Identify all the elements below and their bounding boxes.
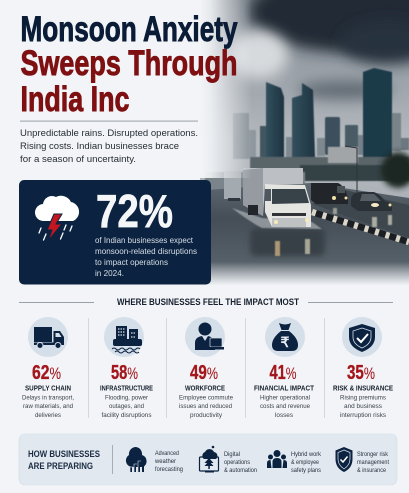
icon: worker at laptop (185, 317, 225, 357)
text: hybrid work (291, 452, 322, 474)
panel: risk and insurance: Rising premiums (340, 394, 387, 402)
text: forecasting: forecasting (155, 467, 183, 473)
panel: 72% statistic (19, 180, 211, 284)
icon: risk shield (336, 447, 352, 472)
text: risk management: Stronger risk (357, 452, 389, 458)
text: forecasting: weather (154, 459, 176, 465)
title: India Inc (20, 80, 130, 119)
hero photo: flooded city road under storm clouds (200, 0, 409, 288)
panel: how businesses are preparing (19, 434, 397, 485)
icon: weather forecasting cloud (126, 447, 147, 472)
icon: digital monitor (200, 446, 218, 472)
panel heading (28, 449, 100, 471)
panel: supply chain: raw materials, and (23, 403, 73, 410)
section heading: WHERE BUSINESSES FEEL THE IMPACT MOST (117, 297, 299, 307)
text: risk management: management (357, 460, 389, 466)
text: digital operations: operations (224, 460, 250, 466)
text: hybrid work: & employee (291, 460, 320, 466)
panel: infrastructure (100, 317, 153, 419)
background truck (224, 171, 241, 201)
car (351, 192, 392, 211)
statistic description: of Indian businesses expect (95, 235, 194, 245)
panel: financial impact: Higher operational (260, 394, 310, 402)
big number: 72% (96, 185, 173, 237)
icon: group of people (267, 450, 287, 468)
panel: financial impact: losses (275, 412, 294, 419)
icon: flooded buildings (104, 317, 144, 357)
title: Monsoon Anxiety (20, 10, 238, 49)
panel: risk and insurance: 35% (347, 362, 375, 384)
panel: supply chain: deliveries (35, 412, 62, 419)
panel: infrastructure: 58% (111, 362, 138, 384)
statistic description: in 2024. (95, 268, 124, 278)
panel: infrastructure: facility disruptions (102, 412, 152, 419)
panel: supply chain: Delays in transport, (22, 394, 74, 402)
title rule (20, 120, 198, 122)
panel: financial impact: FINANCIAL IMPACT (254, 384, 314, 392)
text: digital operations: & automation (224, 468, 257, 474)
text: forecasting (154, 451, 183, 473)
panel: workforce: productivity (190, 412, 223, 419)
intro text: Rising costs. Indian businesses brace (20, 141, 179, 152)
water spray (232, 208, 322, 229)
panel: infrastructure: INFRASTRUCTURE (100, 384, 153, 392)
panel: supply chain: SUPPLY CHAIN (25, 384, 71, 392)
text: digital operations: Digital (224, 452, 240, 458)
main truck (243, 168, 311, 227)
panel: financial impact (254, 317, 314, 419)
panel: infrastructure: outages, and (109, 403, 144, 410)
statistic description: monsoon-related disruptions (95, 246, 197, 256)
text: forecasting: Advanced (155, 451, 179, 457)
truck shadow on water (250, 228, 325, 256)
statistic description: to impact operations (95, 257, 168, 267)
text: risk management (357, 452, 389, 474)
panel: workforce: issues and reduced (179, 403, 232, 410)
text: hybrid work: safety plans (291, 468, 321, 474)
title (20, 10, 238, 119)
panel: supply chain (22, 317, 74, 419)
van (311, 183, 348, 204)
text: digital operations (224, 452, 257, 474)
panel: financial impact: costs and revenue (260, 403, 310, 410)
road barrier (312, 212, 409, 242)
panel: workforce: 49% (190, 362, 218, 384)
text: hybrid work: Hybrid work (291, 452, 322, 458)
panel: workforce (179, 317, 233, 419)
road reflections (275, 208, 392, 256)
left and bottom fades (200, 0, 252, 178)
panel: workforce: WORKFORCE (185, 384, 225, 392)
panel: risk and insurance: and business (344, 403, 383, 410)
panel heading: ARE PREPARING (28, 461, 93, 471)
panel: financial impact: 41% (270, 362, 297, 384)
intro text: Unpredictable rains. Disrupted operations. (20, 128, 198, 139)
icon: storm cloud with lightning (35, 196, 79, 241)
panel: supply chain: 62% (32, 362, 61, 384)
panel: risk and insurance (333, 317, 393, 419)
icon: truck (28, 317, 68, 357)
title: Sweeps Through (20, 44, 238, 83)
intro text (20, 128, 198, 165)
panel: infrastructure: Flooding, power (105, 394, 149, 402)
statistic description (95, 235, 197, 278)
icon: rupee money bag: ₹ (281, 334, 290, 350)
icon: shield with check (342, 317, 382, 357)
panel: risk and insurance: interruption risks (340, 412, 387, 419)
panel: workforce: Employee commute (179, 394, 233, 402)
street lamp (345, 146, 357, 192)
panel: risk and insurance: RISK & INSURANCE (333, 384, 393, 392)
panel heading: HOW BUSINESSES (28, 449, 100, 459)
text: risk management: & insurance (357, 468, 387, 474)
intro text: for a season of uncertainty. (20, 154, 136, 165)
